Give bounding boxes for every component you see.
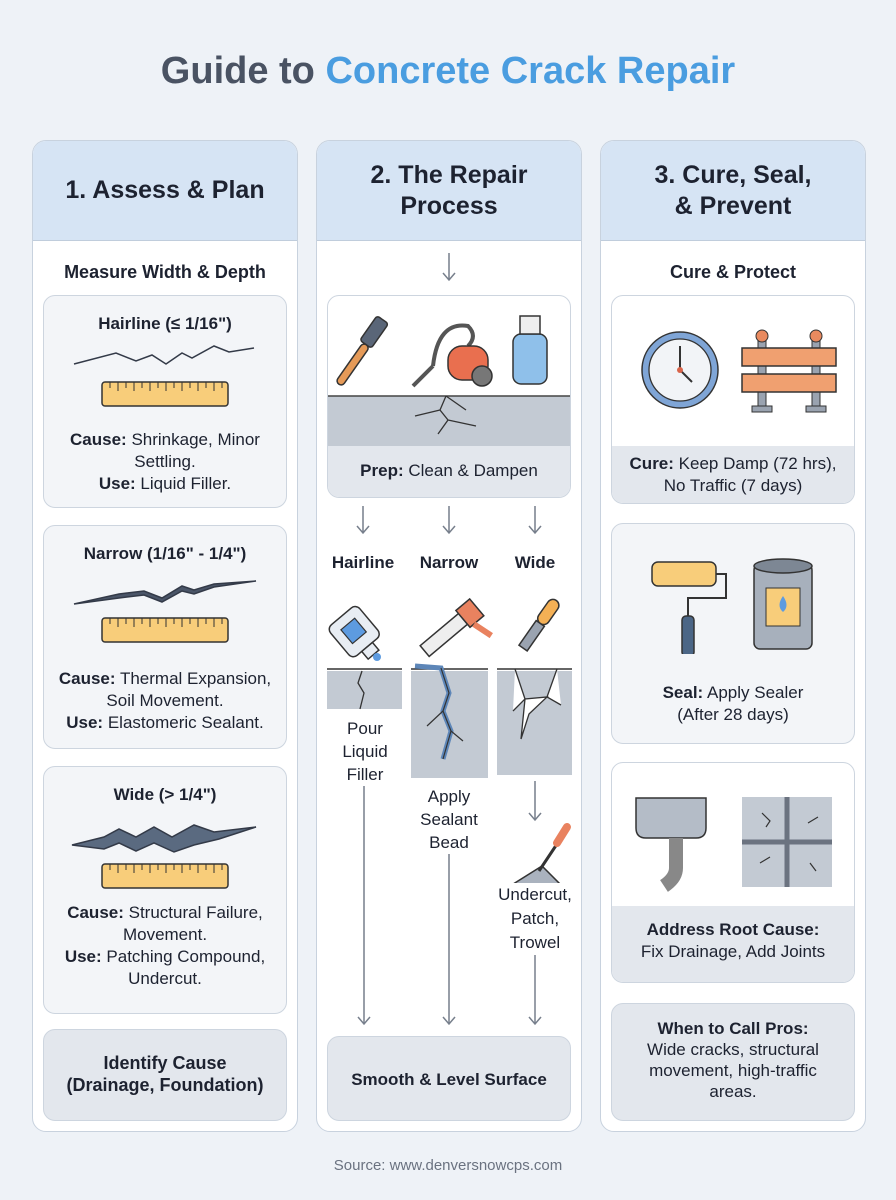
icon: brush vacuum spray with cracked slab (328, 315, 570, 446)
card: cure: No Traffic (7 days) (664, 476, 802, 495)
heading 2: Process (400, 192, 498, 220)
icon: roller and sealer can (651, 558, 813, 654)
heading 3: 3. Cure, Seal, (654, 160, 812, 188)
heading 3 (601, 141, 865, 241)
heading 2: 2. The Repair (370, 160, 528, 188)
icon: narrow crack and ruler (74, 580, 256, 643)
text: pour liquid filler: Pour (347, 719, 383, 738)
heading 3: & Prevent (675, 192, 791, 220)
card: narrow (43, 525, 287, 749)
card: narrow: Cause: Thermal Expansion, (59, 669, 271, 688)
card: seal (611, 523, 855, 744)
icon: clock and barricade (641, 330, 837, 412)
card: smooth & level (327, 1036, 571, 1121)
card: prep (327, 295, 571, 498)
icon: wide crack and ruler (72, 824, 256, 889)
panel: assess & plan (32, 140, 298, 1132)
card: hairline: Hairline (≤ 1/16") (98, 314, 232, 333)
card: hairline (43, 295, 287, 508)
card: wide: Movement. (123, 925, 207, 944)
card: root cause: Fix Drainage, Add Joints (641, 942, 825, 961)
card: wide: Wide (> 1/4") (114, 785, 216, 804)
text: apply sealant bead: Apply (428, 787, 470, 806)
text: apply sealant bead: Sealant (420, 810, 478, 829)
arrow (442, 253, 456, 281)
text: apply sealant bead (409, 785, 489, 854)
card: smooth & level: Smooth & Level Surface (351, 1070, 547, 1089)
panel: cure seal prevent (600, 140, 866, 1132)
text: pour liquid filler (325, 717, 405, 786)
card: seal: Seal: Apply Sealer (663, 683, 803, 702)
card: cure: Cure: Keep Damp (72 hrs), (630, 454, 836, 473)
card: when to call pros: areas. (709, 1082, 757, 1101)
card: identify cause: (Drainage, Foundation) (66, 1075, 264, 1095)
text: undercut patch trowel: Patch, (511, 909, 559, 928)
card: cure (611, 295, 855, 504)
card: wide: Undercut. (128, 969, 202, 988)
text: apply sealant bead: Bead (429, 833, 469, 852)
subheading: cure & protect: Cure & Protect (670, 262, 796, 282)
text: undercut patch trowel (489, 883, 581, 955)
card: seal: (After 28 days) (677, 705, 789, 724)
card: hairline: Use: Liquid Filler. (99, 474, 231, 493)
card: root cause: Address Root Cause: (647, 920, 819, 939)
card: wide: Cause: Structural Failure, (67, 903, 263, 922)
card: wide: Use: Patching Compound, (65, 947, 265, 966)
card: when to call pros: When to Call Pros: (657, 1019, 809, 1038)
icon: hairline crack and ruler (74, 345, 254, 407)
card: identify cause: Identify Cause (103, 1053, 227, 1073)
labels: hairline narrow wide: Hairline (332, 553, 394, 572)
card: identify cause (43, 1029, 287, 1121)
card: when to call pros: Wide cracks, structural (647, 1040, 819, 1059)
card: narrow: Narrow (1/16" - 1/4") (84, 544, 246, 563)
text: pour liquid filler: Liquid (342, 742, 388, 761)
card: wide (43, 766, 287, 1014)
heading 1 (33, 141, 297, 241)
source: Source: www.denversnowcps.com (334, 1157, 562, 1174)
title: Guide to Concrete Crack Repair (161, 50, 735, 92)
icon: gutter and control joints (635, 797, 832, 892)
card: root cause (611, 762, 855, 983)
card: hairline: Cause: Shrinkage, Minor (70, 430, 260, 449)
subheading: measure: Measure Width & Depth (64, 262, 266, 282)
arrows to three methods (356, 506, 542, 534)
card: when to call pros (611, 1003, 855, 1121)
text: pour liquid filler: Filler (347, 765, 383, 784)
panel: repair process: Narrow (420, 553, 478, 572)
icon: three repair methods (327, 598, 572, 1025)
card: hairline: Settling. (134, 452, 196, 471)
heading 2 (317, 141, 581, 241)
text: undercut patch trowel: Undercut, (498, 885, 572, 904)
panel: repair process (316, 140, 582, 1132)
panel: repair process: Wide (515, 553, 555, 572)
card: when to call pros: movement, high-traffic (649, 1061, 817, 1080)
card: prep: Prep: Clean & Dampen (360, 461, 538, 480)
heading 1: 1. Assess & Plan (65, 176, 265, 204)
text: undercut patch trowel: Trowel (510, 933, 560, 952)
card: narrow: Soil Movement. (106, 691, 224, 710)
card: narrow: Use: Elastomeric Sealant. (66, 713, 264, 732)
